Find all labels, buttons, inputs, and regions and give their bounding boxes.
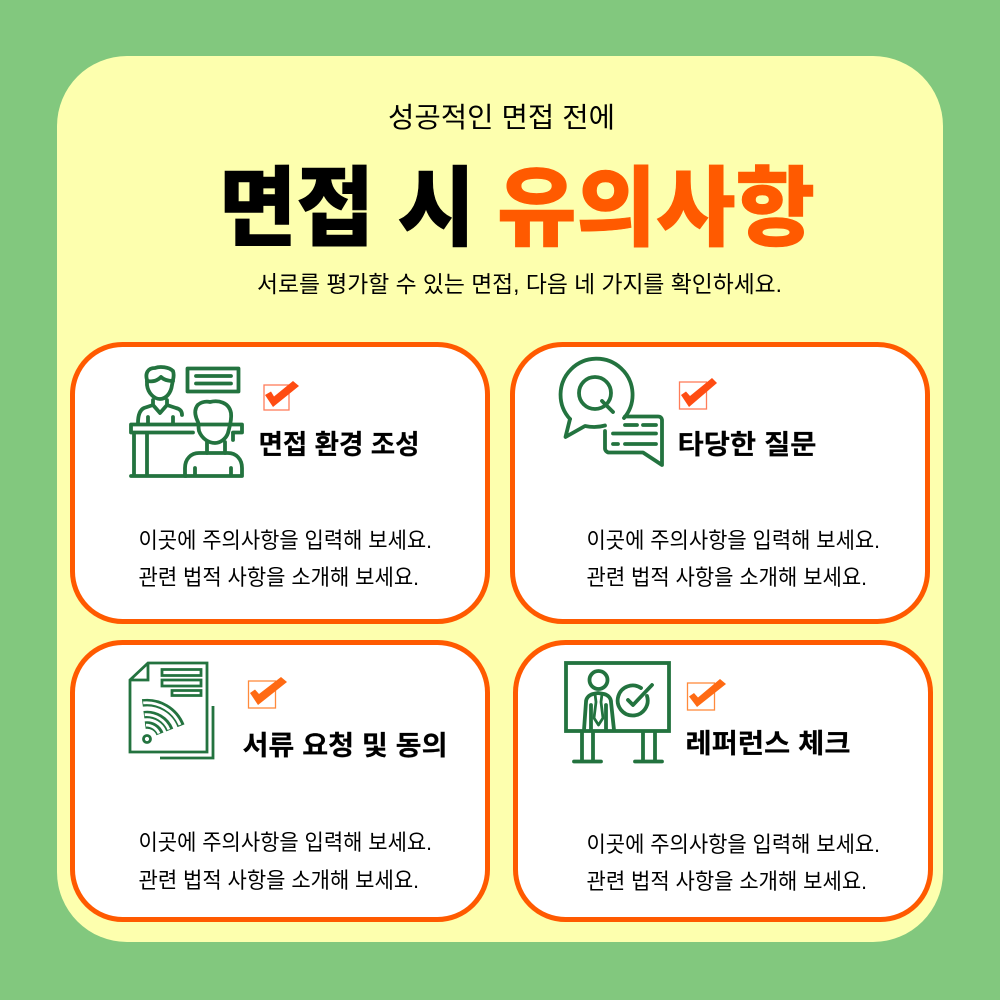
body text (586, 832, 880, 894)
intro text: 서로를 평가할 수 있는 면접, 다음 네 가지를 확인하세요. (257, 271, 782, 297)
body text (138, 830, 432, 893)
panel: reference check (516, 642, 930, 920)
panel: valid questions (512, 344, 928, 622)
body text: 관련 법적 사항을 소개해 보세요. (138, 565, 419, 590)
card heading: 서류 요청 및 동의 (242, 731, 448, 761)
body text: 이곳에 주의사항을 입력해 보세요. (586, 832, 880, 857)
icon: check mark (264, 381, 299, 410)
body text (138, 528, 432, 590)
body text: 관련 법적 사항을 소개해 보세요. (586, 869, 867, 894)
title (219, 160, 815, 258)
body text: 관련 법적 사항을 소개해 보세요. (586, 565, 867, 590)
body text: 이곳에 주의사항을 입력해 보세요. (138, 830, 432, 855)
title: 유의사항 (497, 160, 815, 258)
body text (586, 528, 880, 590)
card heading: 면접 환경 조성 (258, 430, 420, 460)
icon: check mark (680, 378, 717, 409)
icon: check mark (688, 679, 726, 710)
icon: document with signal (130, 663, 213, 758)
panel: interview environment (72, 344, 488, 622)
icon: check mark (248, 677, 287, 708)
panel: yellow background (57, 56, 943, 942)
subtitle heading: 성공적인 면접 전에 (388, 102, 615, 133)
panel: document request (72, 642, 488, 920)
icon: interview desk (131, 367, 242, 476)
title: 면접 시 (219, 160, 475, 258)
body text: 관련 법적 사항을 소개해 보세요. (138, 868, 419, 893)
body text: 이곳에 주의사항을 입력해 보세요. (586, 528, 880, 553)
body text: 이곳에 주의사항을 입력해 보세요. (138, 528, 432, 553)
icon: question speech bubbles (561, 359, 662, 465)
icon: presentation board (566, 663, 669, 762)
card heading: 타당한 질문 (678, 430, 816, 460)
card heading: 레퍼런스 체크 (686, 729, 850, 759)
